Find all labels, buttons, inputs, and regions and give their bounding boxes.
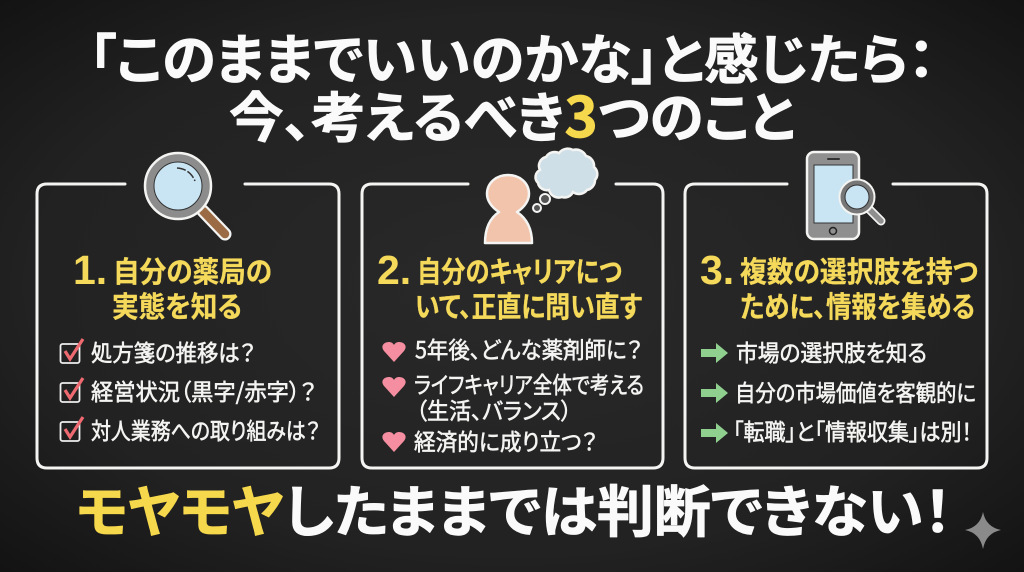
icon: arrow [701,423,728,443]
heading 1: 1. [73,247,107,293]
list 2: 5年後、どんな薬剤師に？ [415,331,642,365]
icon: arrow [701,383,728,403]
icon: person with thought cloud [485,149,597,243]
heading 2: 自分のキャリアにつ [417,249,622,291]
bottom message: モヤモヤ [76,468,284,549]
panel: 3 information [685,152,987,468]
heading 2: いて、正直に問い直す [415,284,642,326]
heading 2 [377,247,642,326]
bottom message: したままでは判断できない！ [284,468,952,549]
heading 1: 実態を知る [112,284,242,326]
icon: heart [382,377,406,397]
title: 「このままでいいのかな」と感じたら： [89,16,935,95]
heading 3 [700,247,978,326]
list 2: （生活、バランス） [416,392,572,426]
icon: phone with magnifier [807,152,881,239]
icon: checkbox [60,417,83,441]
heading 3: ために、情報を集める [740,284,975,326]
icon: heart [382,432,406,452]
checklist 1: 対人業務への取り組みは？ [91,412,320,446]
icon: magnifying glass [145,153,225,234]
list 3: 自分の市場価値を客観的に [735,374,976,408]
icon: sparkle [965,512,1001,549]
list 2: ライフキャリア全体で考える [414,366,644,400]
panel 1 frame [37,184,339,468]
list 3: 市場の選択肢を知る [736,334,927,368]
checklist 1 [60,334,320,446]
checklist 1: 処方箋の推移は？ [91,334,255,368]
icon: arrow [701,343,728,363]
icon: heart [382,342,406,362]
title: 今、考えるべき3つのこと [229,73,795,154]
heading 1: 自分の薬局の [113,249,272,291]
panel 3 frame [685,184,987,468]
heading 3: 3. [700,247,734,293]
panel: 2 career [362,149,663,468]
list 3: 「転職」と「情報収集」は別！ [733,413,972,447]
heading 3: 複数の選択肢を持つ [740,249,978,291]
heading 1 [73,247,272,326]
icon: checkbox [60,339,83,363]
list 2: 経済的に成り立つ？ [414,423,597,457]
icon: checkbox [60,378,83,402]
heading 2: 2. [377,247,411,293]
checklist 1: 経営状況（黒字/赤字）？ [91,373,316,407]
list 2 [382,331,644,457]
title [89,16,935,154]
panel 2 frame [362,184,663,468]
panel: 1 know your pharmacy [37,153,339,468]
list 3 [701,334,976,447]
